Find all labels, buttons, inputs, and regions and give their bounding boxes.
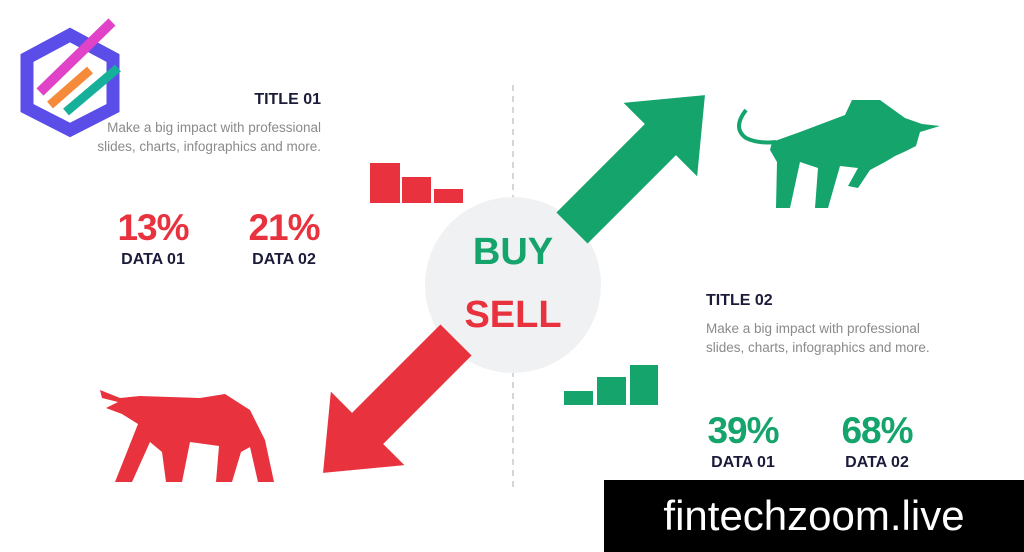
watermark box: fintechzoom.live — [663, 492, 965, 539]
stat 21%: 21% — [248, 207, 320, 248]
icon: bear — [100, 390, 274, 482]
stat 21% — [248, 207, 320, 268]
icon: logo — [27, 22, 118, 130]
text: desc 01: slides, charts, infographics and more. — [97, 139, 321, 154]
stat 68%: DATA 02 — [845, 454, 909, 471]
arrow: green up — [535, 58, 742, 265]
watermark box — [604, 480, 1024, 552]
text: desc 01: Make a big impact with professional — [107, 120, 321, 135]
stat 68% — [841, 410, 913, 471]
circle — [425, 197, 601, 373]
stat 13%: DATA 01 — [121, 251, 185, 268]
stat 39%: DATA 01 — [711, 454, 775, 471]
BUY label: BUY — [473, 231, 553, 273]
text: desc 01 — [97, 120, 321, 154]
stat 68%: 68% — [841, 410, 913, 451]
title 01: TITLE 01 — [254, 91, 321, 108]
stat 13% — [117, 207, 189, 268]
title 02: TITLE 02 — [706, 292, 773, 309]
text: desc 02 — [706, 321, 930, 355]
stat 21%: DATA 02 — [252, 251, 316, 268]
text: desc 02: slides, charts, infographics and more. — [706, 340, 930, 355]
SELL label: SELL — [464, 294, 562, 336]
stat 39% — [707, 410, 779, 471]
text: desc 02: Make a big impact with professional — [706, 321, 920, 336]
stat 39%: 39% — [707, 410, 779, 451]
stat 13%: 13% — [117, 207, 189, 248]
bars: red — [370, 163, 463, 203]
icon: bull — [739, 100, 940, 208]
bars: green — [564, 365, 658, 405]
arrow: red down — [286, 303, 493, 510]
